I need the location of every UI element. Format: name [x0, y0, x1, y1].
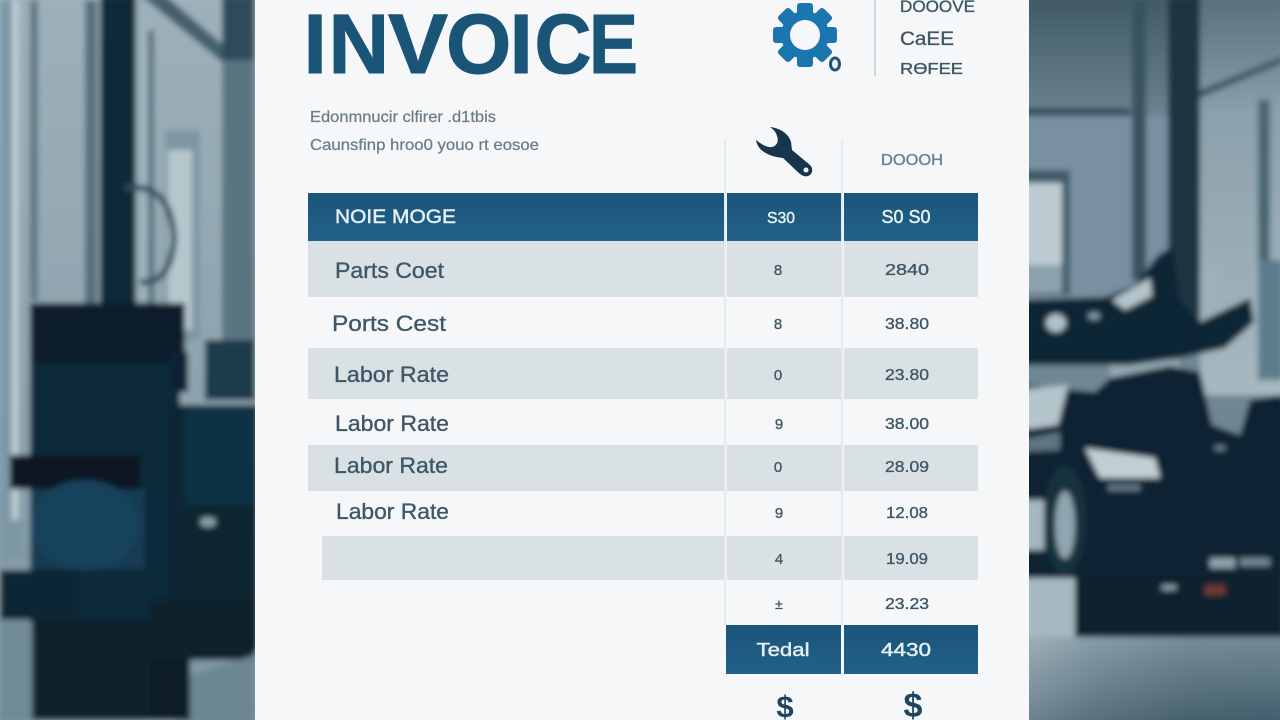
row 4: Labor Rate: Labor Rate — [335, 411, 449, 436]
table header row: S0 S0 — [882, 207, 930, 227]
row 5: Labor Rate: 0 — [774, 459, 782, 476]
row 2: Parts Cost: 38.80 — [885, 316, 929, 333]
row 7: blank label: 19.09 — [886, 551, 928, 568]
row 1: Parts Cost: Parts Coet — [335, 258, 444, 283]
icon: wrench — [756, 127, 812, 176]
company details text: CaEE — [900, 29, 954, 50]
customer details text — [310, 109, 539, 154]
row 6: Labor Rate — [336, 499, 928, 524]
header divider line — [874, 0, 876, 76]
title: INVOICE — [304, 0, 638, 91]
row 5: Labor Rate — [308, 445, 978, 491]
row 6: Labor Rate: Labor Rate — [336, 499, 449, 524]
table header row: NOIE MOGE — [335, 207, 456, 228]
invoice sheet panel — [255, 0, 1029, 720]
total row — [726, 625, 978, 674]
row 4: Labor Rate — [335, 411, 929, 436]
company details text: RӨFEE — [900, 61, 963, 78]
company details text — [900, 0, 975, 78]
row 2: Parts Cost: 8 — [774, 316, 782, 333]
icon: gear logo — [773, 3, 842, 72]
row 3: Labor Rate: 23.80 — [885, 367, 929, 384]
row 3: Labor Rate — [308, 348, 978, 399]
row 8: blank label: 23.23 — [885, 596, 929, 613]
row 1: Parts Cost: 2840 — [885, 262, 929, 279]
row 7: blank label: 4 — [775, 551, 783, 568]
row 1: Parts Cost: 8 — [774, 262, 782, 279]
column rules — [725, 140, 842, 625]
row 6: Labor Rate: 9 — [775, 505, 783, 522]
row 8: blank label: ± — [775, 596, 783, 612]
table of invoice rows — [308, 140, 978, 674]
row 6: Labor Rate: 12.08 — [886, 505, 928, 522]
row 3: Labor Rate: Labor Rate — [334, 362, 449, 387]
row 1: Parts Cost — [308, 241, 978, 297]
row 4: Labor Rate: 38.00 — [885, 416, 929, 433]
customer details text: Edonmnucir clfirer .d1tbis — [310, 109, 496, 126]
total row: 4430 — [881, 640, 931, 660]
row 8: blank label — [775, 596, 929, 613]
row 2: Parts Cost: Ports Cest — [332, 311, 446, 336]
table header row — [308, 193, 978, 241]
row 3: Labor Rate: 0 — [774, 367, 782, 384]
row 5: Labor Rate: Labor Rate — [334, 453, 448, 478]
row 4: Labor Rate: 9 — [775, 416, 783, 433]
background photo: right garage with lifted car — [1020, 0, 1280, 720]
total row: Tedal — [756, 640, 810, 660]
table header row: S30 — [767, 210, 795, 227]
row 2: Parts Cost — [332, 311, 929, 336]
customer details text: Caunsfinp hroo0 youo rt eosoe — [310, 137, 539, 154]
row 7: blank label — [322, 536, 978, 580]
background photo: left workshop — [0, 0, 260, 720]
row 5: Labor Rate: 28.09 — [885, 459, 929, 476]
column heading: DOOOH: DOOOH — [881, 152, 943, 169]
